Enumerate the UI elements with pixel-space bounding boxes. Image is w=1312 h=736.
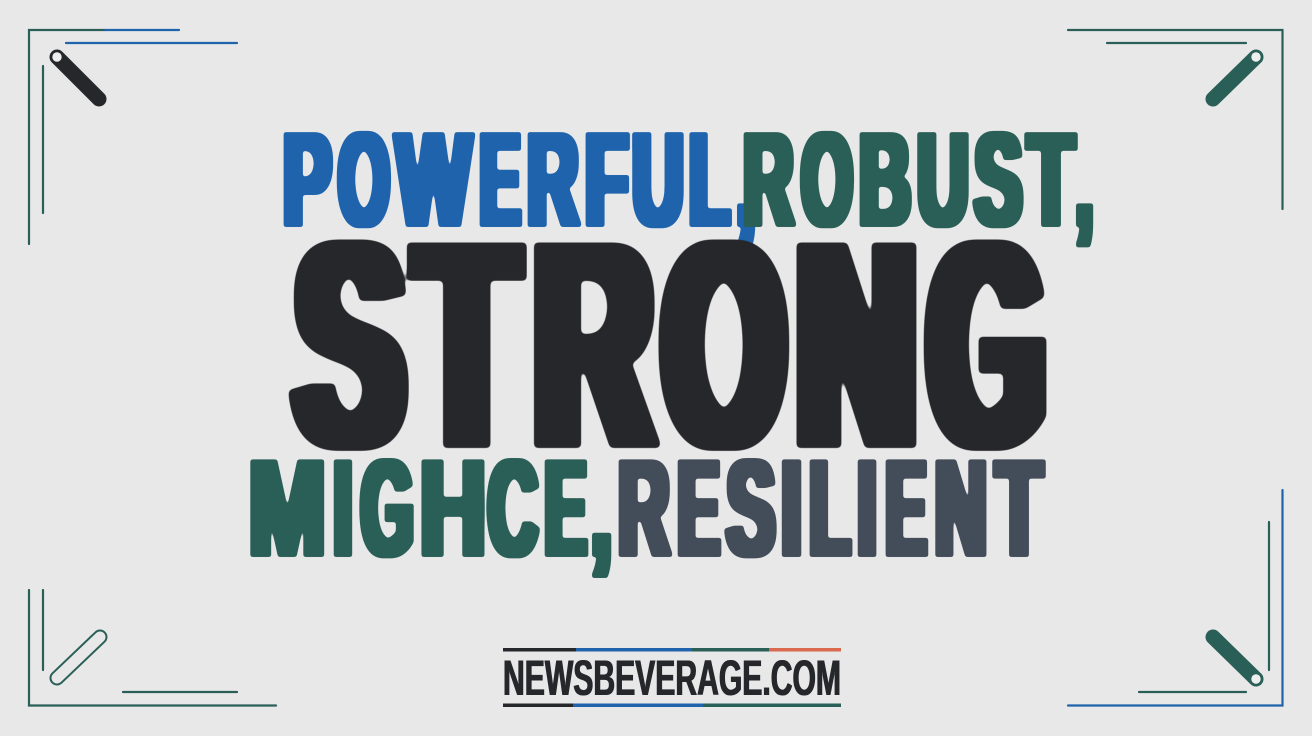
word: RESILIENT: R [618,432,669,584]
word: MIGHCE: G [361,432,413,584]
word: RESILIENT: E [886,432,926,584]
word: RESILIENT: N [935,432,987,584]
word: RESILIENT: L [810,432,850,584]
word: STRONG: T [417,183,516,507]
word: ROBUST [744,106,1093,253]
word: POWERFUL: F [585,106,628,253]
word: POWERFUL: U [632,106,684,253]
logo bottom rule [503,704,841,707]
word: STRONG: G [930,183,1044,507]
word: POWERFUL: E [480,106,520,253]
word: POWERFUL: R [527,106,578,253]
corner frame: bottom left [29,590,276,706]
corner frame: top left [29,30,237,244]
word: STRONG: O [664,183,784,507]
word: RESILIENT: S [727,432,775,584]
logo: newsbeverage.com [503,648,841,707]
word: MIGHCE: M [249,432,326,584]
word: MIGHCE: , [591,432,612,584]
word: POWERFUL: O [339,106,389,253]
word: MIGHCE: H [420,432,486,584]
word: POWERFUL [283,106,755,253]
word: RESILIENT: T [996,432,1042,584]
word: ROBUST: R [744,106,793,253]
word: RESILIENT: I [858,432,876,584]
word: POWERFUL: P [283,106,331,253]
text: , [737,106,755,253]
word: MIGHCE [249,432,612,584]
word: STRONG [296,183,1044,507]
word: MIGHCE: I [334,432,352,584]
word: ROBUST: U [918,106,968,253]
word: ROBUST: T [1028,106,1074,253]
word: MIGHCE: E [545,432,586,584]
word: STRONG: R [535,183,651,507]
logo top rule [503,648,841,652]
word: MIGHCE: C [488,432,537,584]
word: POWERFUL: W [396,106,471,253]
corner frame: bottom right [1068,490,1282,706]
word: POWERFUL: L [690,106,730,253]
word: ROBUST: S [975,106,1022,253]
word: RESILIENT: E [678,432,719,584]
word: ROBUST: B [859,106,911,253]
word: STRONG: N [798,183,915,507]
word: RESILIENT: I [781,432,802,584]
word: STRONG: S [296,183,403,507]
word: ROBUST: O [802,106,852,253]
logo text: NEWSBEVERAGE.COM [503,650,841,706]
corner frame: top right [1068,30,1282,209]
word: RESILIENT [618,432,1042,584]
text: , [1076,106,1093,253]
